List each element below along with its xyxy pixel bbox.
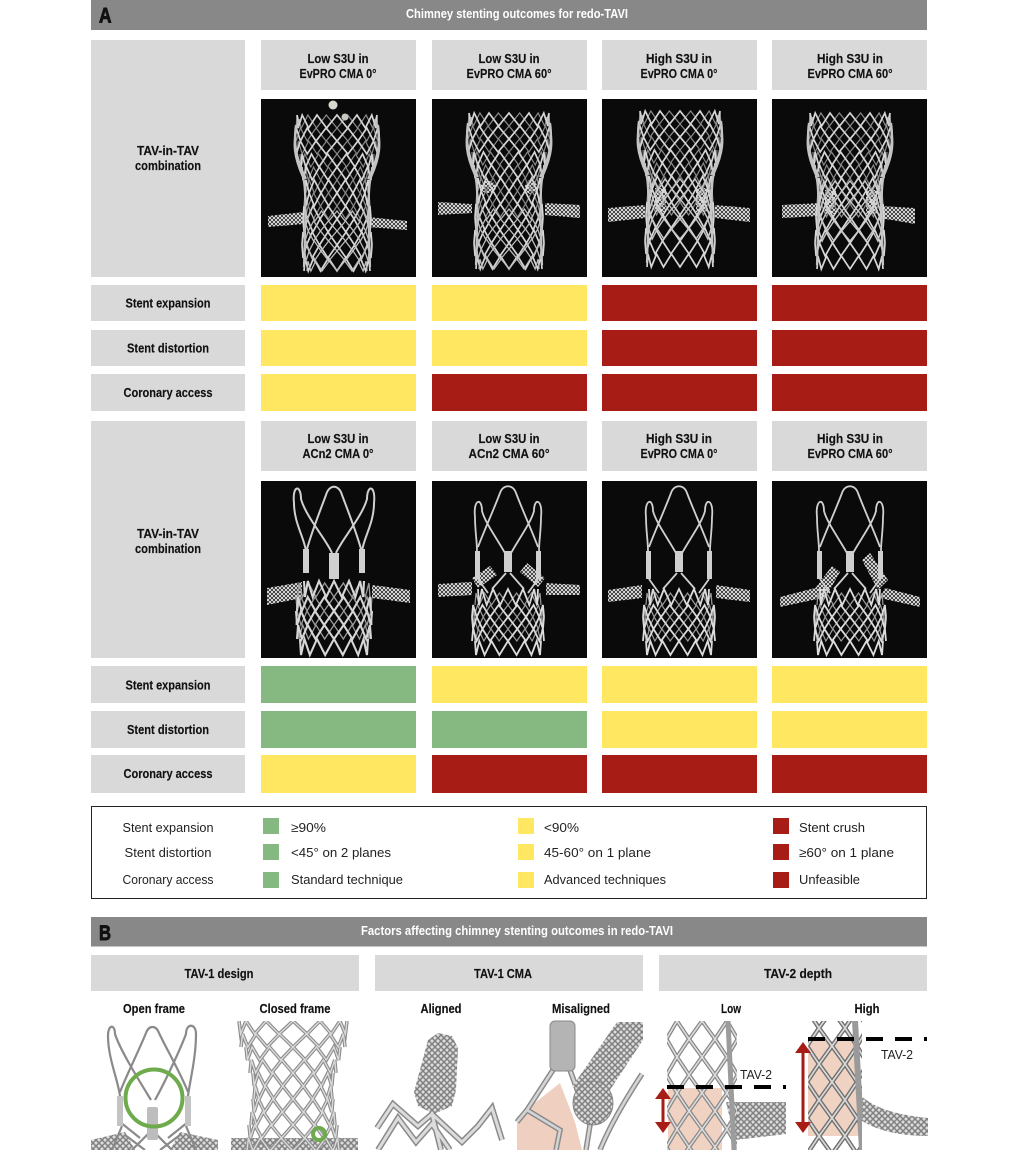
reference line: TAV-2 low [667,1085,786,1089]
row label: stent distortion (bottom) [91,711,245,748]
panel: open frame [91,1001,218,1150]
row label: TAV-in-TAV combination (bottom) [91,421,245,658]
legend yellow column: <90% [544,820,579,835]
panel: closed frame: Closed frame [260,1001,330,1016]
column header: Low S3U in EvPRO CMA 0: Low S3U in [308,51,369,66]
panel: misaligned: Misaligned [552,1001,610,1016]
subheader: TAV-2 depth: TAV-2 depth [764,966,832,981]
subheader: TAV-1 design: TAV-1 design [184,966,254,981]
subheader: TAV-2 depth [659,955,927,991]
column header: Low S3U in ACn2 CMA 0 [261,421,416,471]
row label: stent distortion (top) [91,330,245,366]
panel: TAV-2 high: High [854,1001,880,1016]
legend row labels [122,820,214,887]
stent image: low ACn2 60 [432,481,587,658]
column header: High S3U in EvPRO CMA 0 (bottom): High S3U in [646,431,712,446]
stent image: low EvPRO 0 [261,99,416,277]
column header: Low S3U in EvPRO CMA 60: EvPRO CMA 60° [466,66,552,81]
icon: green ring large coronary cell [126,1070,182,1126]
column header: Low S3U in ACn2 CMA 60: Low S3U in [478,431,540,446]
legend red column: Unfeasible [799,872,860,887]
legend green column: ≥90% [291,820,326,835]
legend green column [263,818,403,888]
row label: stent distortion (bottom): Stent distortion [127,722,209,737]
column header: High S3U in EvPRO CMA 0: EvPRO CMA 0° [640,66,718,81]
reference line: TAV-2 high [808,1037,927,1041]
panel: TAV-2 low: Low [721,1001,742,1016]
row label: coronary access (top): Coronary access [124,385,212,400]
stent image: high EvPRO 0 [602,99,757,277]
section letter A: A [99,4,112,28]
panel: aligned: Aligned [420,1001,462,1016]
column header: Low S3U in EvPRO CMA 60: Low S3U in [478,51,540,66]
row label: stent expansion (bottom) [91,666,245,703]
legend yellow column: 45-60° on 1 plane [544,845,651,860]
column header: High S3U in EvPRO CMA 60: EvPRO CMA 60° [808,66,892,81]
legend green column: <45° on 2 planes [291,845,391,860]
panel: open frame: Open frame [123,1001,185,1016]
column header: Low S3U in EvPRO CMA 60 [432,40,587,90]
icon: green ring small coronary cell [313,1128,325,1140]
legend yellow column [518,818,666,888]
column header: High S3U in EvPRO CMA 60: High S3U in [817,51,883,66]
row label: stent distortion (top): Stent distortion [127,340,209,356]
column header: High S3U in EvPRO CMA 0 (bottom): EvPRO CMA 0° [640,446,718,461]
column header: High S3U in EvPRO CMA 60 (bottom) [772,421,927,471]
section B header bar [91,917,927,946]
row label: TAV-in-TAV combination (top) [91,40,245,277]
stent image: high EvPRO 60 (bottom) [772,481,927,658]
panel: misaligned [517,1001,643,1150]
stent image: low EvPRO 60 [432,99,587,277]
column header: High S3U in EvPRO CMA 0 [602,40,757,90]
stent image: high EvPRO 60 [772,99,927,277]
outcome grid: bottom [261,666,927,793]
subheader: TAV-1 CMA: TAV-1 CMA [474,966,533,981]
legend [92,806,926,898]
row label: coronary access (top) [91,374,245,411]
column header: Low S3U in ACn2 CMA 0: ACn2 CMA 0° [302,446,374,461]
panel: aligned [377,1001,502,1150]
stent image: high EvPRO 0 (bottom) [602,481,757,658]
row label: stent expansion (top) [91,285,245,321]
legend yellow column: Advanced techniques [544,872,666,887]
label: TAV-2 low: TAV-2 [740,1067,772,1082]
panel: TAV-2 high [795,1003,928,1150]
column header: Low S3U in ACn2 CMA 60: ACn2 CMA 60° [468,446,550,461]
section A title: Chimney stenting outcomes for redo-TAVI [406,7,628,21]
legend green column: Standard technique [291,872,403,887]
row label: TAV-in-TAV combination (top): combination [135,158,201,173]
column header: Low S3U in ACn2 CMA 60 [432,421,587,471]
section B title: Factors affecting chimney stenting outcomes in redo-TAVI [361,924,673,938]
subheader: TAV-1 CMA [375,955,643,991]
row label: TAV-in-TAV combination (top): TAV-in-TAV [137,143,199,158]
legend red column: ≥60° on 1 plane [799,845,894,860]
row label: coronary access (bottom): Coronary access [124,766,212,781]
subheader: TAV-1 design [91,955,359,991]
row label: stent expansion (top): Stent expansion [126,296,211,310]
label: TAV-2 high: TAV-2 [881,1047,913,1062]
panel: closed frame [231,1001,358,1150]
section letter B: B [99,922,111,945]
row label: stent expansion (bottom): Stent expansion [126,678,211,692]
row label: coronary access (bottom) [91,755,245,793]
arrow: high depth [795,1042,811,1133]
column header: Low S3U in EvPRO CMA 0 [261,40,416,90]
column header: High S3U in EvPRO CMA 60 (bottom): EvPRO CMA 60° [808,446,892,461]
column header: High S3U in EvPRO CMA 60 [772,40,927,90]
row label: TAV-in-TAV combination (bottom): TAV-in-TAV [137,526,199,541]
column header: High S3U in EvPRO CMA 60 (bottom): High S3U in [817,431,883,446]
column header: Low S3U in EvPRO CMA 0: EvPRO CMA 0° [300,66,376,81]
stent image: low ACn2 0 [261,481,416,658]
column header: Low S3U in ACn2 CMA 0: Low S3U in [308,431,369,446]
legend red column: Stent crush [799,820,865,835]
legend red column [773,818,894,888]
section A header bar [91,0,927,30]
outcome grid: top [261,285,927,411]
panel: TAV-2 low [652,1001,786,1150]
row label: TAV-in-TAV combination (bottom): combination [135,541,201,556]
legend row labels: Stent expansion [122,820,214,835]
column header: High S3U in EvPRO CMA 0: High S3U in [646,51,712,66]
legend row labels: Stent distortion [124,845,212,860]
column header: High S3U in EvPRO CMA 0 (bottom) [602,421,757,471]
arrow: low depth [655,1088,671,1133]
legend row labels: Coronary access [122,872,214,887]
